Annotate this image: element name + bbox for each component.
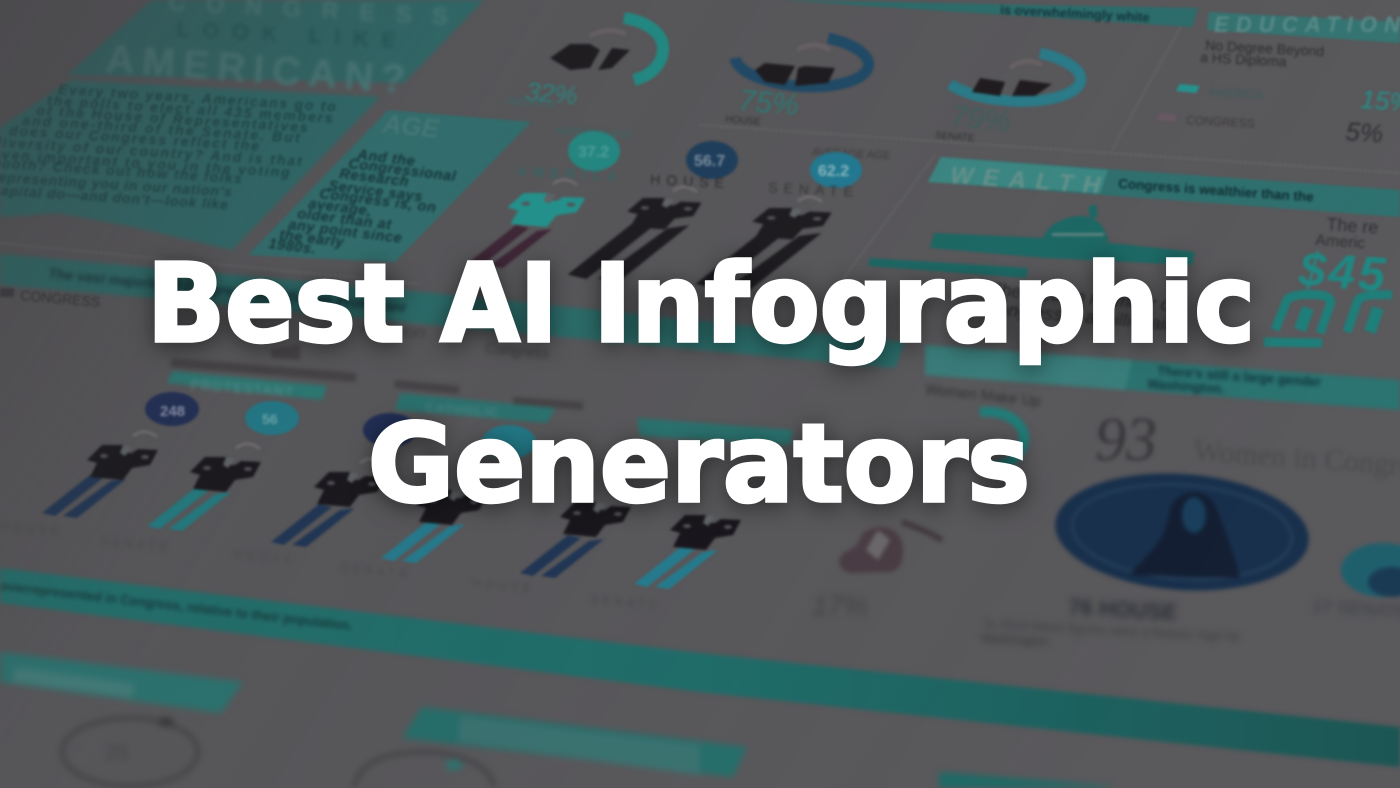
badge: senate 62.2: SENATE <box>768 179 860 200</box>
icon: capitol building <box>868 204 1195 278</box>
figure: house <box>568 187 702 282</box>
chart: women arc <box>980 412 1024 468</box>
title <box>147 242 1255 527</box>
band: catholic <box>395 393 556 423</box>
gauge: lower left circle: 25 <box>105 740 129 765</box>
badge: house catholic <box>363 413 417 447</box>
donut: america: AMERICA <box>505 95 556 111</box>
text block: intro paragraph: even important to you in the voting <box>0 146 291 180</box>
text block: intro paragraph: the polls to elect all 435 members <box>47 92 333 126</box>
heading: look like america: AMERICAN? <box>104 37 407 102</box>
icon: big navy circle <box>1051 465 1313 599</box>
figure: senate catholic <box>381 490 487 563</box>
badge: senate 62.2: 62.2 <box>818 163 849 180</box>
badge: 248: 248 <box>160 403 185 420</box>
badge: america 37.2 <box>517 125 633 185</box>
chart: average age figures <box>468 125 890 292</box>
donut: house: HOUSE <box>725 114 761 128</box>
section: wealth <box>868 157 1400 343</box>
labels: figure captions: HOUSE <box>0 519 63 538</box>
text block: age note: 1980s. <box>268 236 317 258</box>
labels: women counts <box>980 594 1400 649</box>
badge: senate 62.2: AVERAGE AGE <box>812 146 890 162</box>
band: lower left label <box>0 652 243 713</box>
labels: figure captions: SENATE <box>100 534 172 554</box>
band: jewish <box>637 418 793 445</box>
stat: median net worth <box>1296 214 1390 302</box>
text block: age note: older than at <box>297 206 393 234</box>
band: overwhelmingly white <box>780 0 1198 27</box>
title line 1: Best AI Infographic <box>147 242 1255 367</box>
badge: america 37.2: 37.2 <box>578 144 609 161</box>
figure: america <box>468 180 585 268</box>
stat: median net worth: $45 <box>1296 243 1390 302</box>
band: vast majority <box>0 254 905 368</box>
text block: intro paragraph: does our Congress reflect the <box>9 122 260 154</box>
legend: education: 5% <box>1345 116 1384 149</box>
labels: figure captions <box>0 519 662 612</box>
panel: teal header <box>67 0 484 83</box>
text block: age note: Research <box>339 166 410 191</box>
title line 2: Generators <box>368 402 1030 527</box>
icons: teal padlocks <box>1264 295 1392 343</box>
text block: intro paragraph <box>0 81 337 212</box>
chart: race donuts <box>505 18 1081 144</box>
band: overwhelmingly white: is overwhelmingly white <box>1000 2 1150 25</box>
section: gender <box>839 345 1400 573</box>
text block: age note: Service says <box>328 178 424 206</box>
bands: top right <box>780 0 1400 43</box>
band: gender: Washington. <box>1147 376 1225 396</box>
figure: senate protestant <box>147 444 261 531</box>
badge: house 56.7: HOUSE <box>650 171 730 191</box>
text: wealth note behind title: Congress is a millionaire <box>985 298 1182 335</box>
stat: median net worth: Americ <box>1315 232 1366 252</box>
band: wealth: WEALTH <box>950 162 1102 199</box>
labels: women counts: 76 HOUSE <box>1068 594 1178 625</box>
text block: age note <box>268 147 458 258</box>
text block: age note: Congress is, on <box>319 186 437 216</box>
text block: age note: And the <box>356 147 416 170</box>
band: vast majority: The vast majority of Congress identifies as Protestant <box>48 265 408 315</box>
figure: house protestant <box>42 432 158 518</box>
donut: house <box>725 38 869 128</box>
labels: women counts: Washington. <box>980 630 1052 649</box>
donut: house: 75% <box>737 84 800 122</box>
text block: intro paragraph: Every two years, Americans go to <box>58 81 337 114</box>
heading: age: AGE <box>380 108 441 144</box>
labels: women counts: In 2014 these figures were a historic high for <box>985 616 1242 644</box>
badge: house 56.7 <box>650 141 738 191</box>
labels: figure captions: SENATE <box>590 592 662 612</box>
legend: education: No Degree Beyond <box>1205 37 1325 59</box>
text block: age note: average, <box>308 196 373 220</box>
band: wealth <box>928 157 1400 217</box>
panel: intro header and body <box>0 0 484 250</box>
section: lower labels <box>0 652 1110 788</box>
section: middle labels <box>167 317 793 445</box>
band: lower middle label <box>402 707 747 777</box>
icon: teal circle <box>1341 543 1400 597</box>
legend: congress: CONGRESS <box>20 287 101 310</box>
text block: intro paragraph: and one-third of the Senate. But <box>22 112 302 146</box>
text: congress caption: Congress <box>485 340 551 363</box>
labels: figure captions: HOUSE <box>472 576 535 595</box>
band: catholic: CATHOLIC <box>425 400 500 420</box>
badge: senate 62.2 <box>768 146 890 200</box>
band: lower right label <box>939 772 1110 788</box>
stat: median net worth: The re <box>1326 214 1379 238</box>
text: wealth note behind title <box>985 279 1182 335</box>
band: gender: There's still a large gender <box>1157 363 1322 389</box>
band: wealth: Congress is wealthier than the <box>1118 176 1315 205</box>
heading: look like america <box>104 0 449 102</box>
donut: america <box>505 18 663 111</box>
legend: education: CONGRESS <box>1186 113 1255 131</box>
labels: figure captions: HOUSE <box>233 547 296 566</box>
figure: senate <box>696 197 832 292</box>
legend: education: AMERICA <box>1208 85 1263 102</box>
heading: look like america: LOOK LIKE <box>176 16 397 53</box>
badge: house 56.7: 56.7 <box>694 153 725 170</box>
legend: education <box>1156 37 1400 149</box>
band: protestant <box>167 371 327 400</box>
stat: 17 percent: 17% <box>812 590 868 621</box>
figure: senate jewish <box>634 515 741 589</box>
text block: age note: the early <box>279 227 345 251</box>
text block: intro paragraph: diversity of our country? And is that <box>0 134 304 169</box>
badge: senate catholic <box>482 425 536 459</box>
band: protestant: PROTESTANT <box>190 376 295 399</box>
badge: senate protestant: 56 <box>262 411 278 427</box>
panel: teal body <box>0 80 380 250</box>
gauge: lower left circle <box>62 717 198 786</box>
badge: america 37.2: AVERAGE AGE <box>555 125 633 141</box>
stat: 93 women <box>1095 406 1400 484</box>
text: wealth note behind title: The median member of <box>990 279 1179 315</box>
band: gender <box>925 345 1400 410</box>
stat: 93 women: 93 <box>1095 406 1157 474</box>
icon: woman <box>839 522 942 573</box>
dotted dividers <box>0 10 1400 290</box>
figure: house catholic <box>271 459 385 547</box>
text: religion caption: Religion <box>360 317 426 343</box>
labels: figure captions: SENATE <box>340 561 412 581</box>
badge: senate protestant <box>245 401 299 435</box>
badge: america 37.2: AMERICA <box>517 163 623 185</box>
figure: house jewish <box>520 502 631 578</box>
donut: america: 32% <box>524 76 579 111</box>
band: long teal ribbon: overrepresented in Congress, relative to their population. <box>0 578 354 633</box>
gauge: lower middle circle <box>354 752 494 787</box>
text block: intro paragraph: of the House of Representatives <box>36 102 308 135</box>
donut: senate <box>935 53 1081 144</box>
text: women make up: Women Make Up <box>925 381 1041 410</box>
panel: age <box>248 108 531 262</box>
band: education: EDUCATION <box>1214 12 1400 37</box>
text block: age note: Congressional <box>348 156 458 185</box>
donut: senate: SENATE <box>935 130 975 144</box>
labels: grey caption bars <box>170 344 583 410</box>
chart: religion figures <box>42 392 741 589</box>
text block: age note: any point since <box>288 217 403 247</box>
badge: 248 <box>145 392 199 426</box>
legend: education: a HS Diploma <box>1200 49 1287 70</box>
donut: senate: 79% <box>949 100 1012 138</box>
band: long teal ribbon <box>0 568 1400 767</box>
